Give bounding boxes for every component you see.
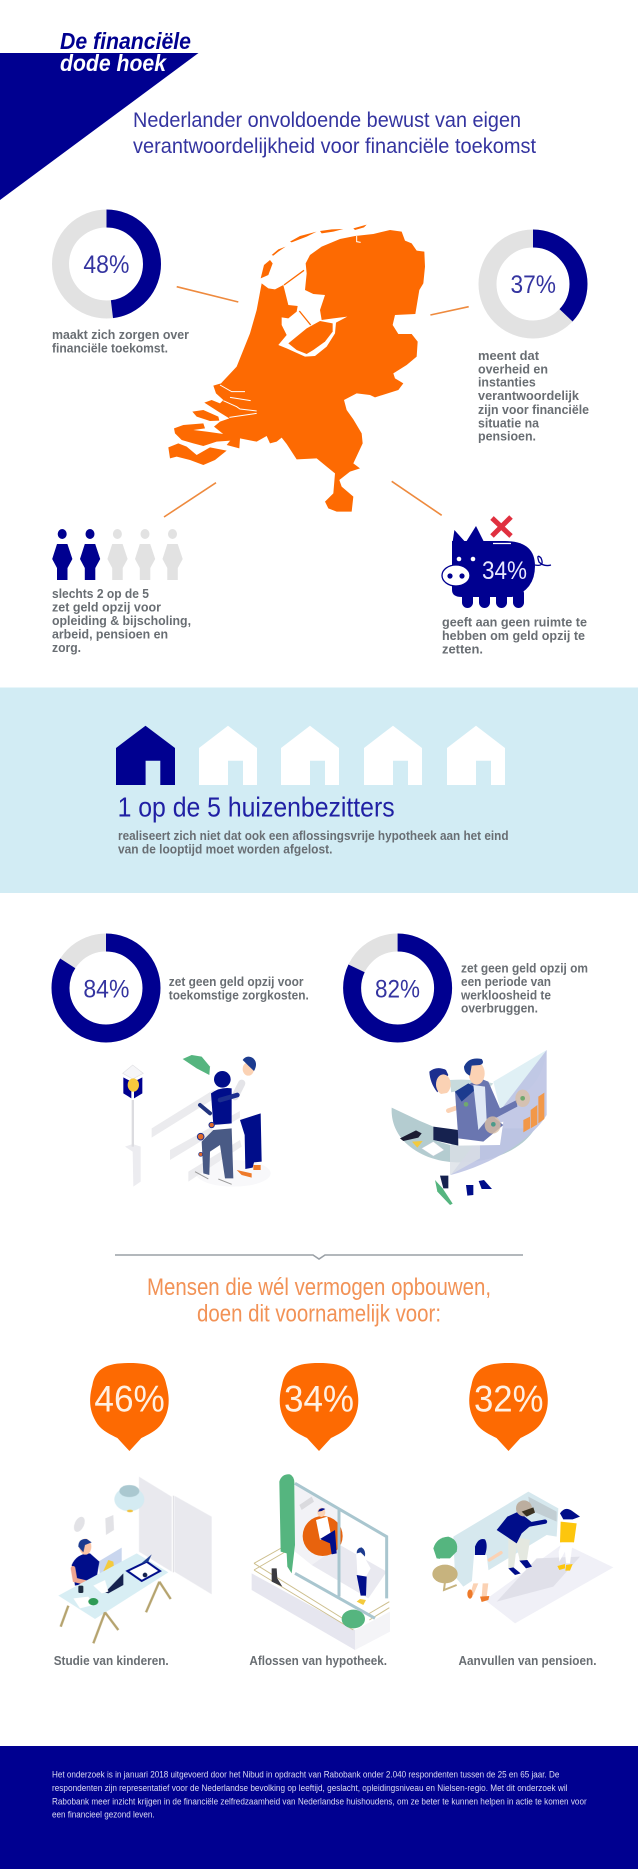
text: 2 of 5 caption <box>52 587 191 655</box>
text: 37% caption: situatie na <box>478 416 540 430</box>
text: 48% caption <box>52 328 189 356</box>
title <box>60 28 191 76</box>
illustration: family on sofa <box>432 1492 613 1623</box>
map: dikes <box>284 270 311 325</box>
icon: piggy bank 34%: 34% <box>482 557 527 585</box>
text: 2 of 5 caption: zet geld opzij voor <box>52 600 161 614</box>
text: Studie van kinderen: Studie van kinderen. <box>54 1654 169 1668</box>
illustration: balcony with orange chair <box>252 1474 390 1650</box>
text: piggy bank caption: hebben om geld opzij te <box>442 629 585 643</box>
heading: 1 op de 5 huizenbezitters: 1 op de 5 huizenbezitters <box>118 792 395 823</box>
divider with notch <box>115 1255 523 1259</box>
callout: 34% <box>280 1363 358 1451</box>
donut: 48% <box>61 218 152 310</box>
callout: 34%: 34% <box>284 1379 354 1420</box>
map of the Netherlands <box>168 225 425 512</box>
icon row: houses 1 of 5 <box>116 726 505 785</box>
subtitle: verantwoordelijkheid voor financiële toekomst <box>133 135 536 158</box>
text: 37% caption: instanties <box>478 376 536 390</box>
text: 37% caption: meent dat <box>478 349 540 363</box>
text: homeowners body <box>118 829 508 856</box>
subtitle: Nederlander onvoldoende bewust van eigen <box>133 109 521 132</box>
text: research note: een financieel gezond leven. <box>52 1810 155 1821</box>
illustration: couple on stairs with lamp post <box>123 1055 271 1187</box>
heading: people who build wealth <box>147 1274 491 1328</box>
text: 48% caption: maakt zich zorgen over <box>52 328 189 342</box>
text: piggy bank caption: zetten. <box>442 642 483 656</box>
text: 82% caption: overbruggen. <box>461 1002 538 1016</box>
text: homeowners body: van de looptijd moet worden afgelost. <box>118 842 332 856</box>
text: piggy bank caption: geeft aan geen ruimte te <box>442 616 587 630</box>
donut: 48%: 48% <box>83 251 129 279</box>
text: research note: respondenten zijn representatief voor de Nederlandse bevolking op leeftijd, geslacht, opleidingsniveau en Nielsen-regio. Met dit onderzoek wil <box>52 1783 568 1794</box>
donut: 82%: 82% <box>375 975 420 1003</box>
illustration: couple with financial chart <box>392 1050 547 1205</box>
connector lines <box>164 287 469 517</box>
donut: 37%: 37% <box>510 271 556 299</box>
illustration: man studying at desk <box>58 1477 212 1643</box>
title: De financiële <box>60 28 191 54</box>
map: Wadden islands <box>261 225 367 278</box>
text: 37% caption: verantwoordelijk <box>478 389 579 403</box>
text: 84% caption: toekomstige zorgkosten. <box>169 988 309 1002</box>
text: 84% caption: zet geen geld opzij voor <box>169 975 304 989</box>
text: research note: Het onderzoek is in januari 2018 uitgevoerd door het Nibud in opdracht van Rabobank onder 2.040 respondenten tussen de 25 en 65 jaar. De <box>52 1769 559 1780</box>
text: piggy bank caption <box>442 616 587 656</box>
text: 37% caption: zijn voor financiële <box>478 403 589 417</box>
title: dode hoek <box>60 50 167 76</box>
text: 84% caption <box>169 975 309 1002</box>
subtitle <box>133 109 536 158</box>
text: Aflossen van hypotheek: Aflossen van hypotheek. <box>249 1654 387 1668</box>
text: 2 of 5 caption: arbeid, pensioen en <box>52 628 168 642</box>
text: 2 of 5 caption: zorg. <box>52 641 81 655</box>
text: 2 of 5 caption: slechts 2 op de 5 <box>52 587 149 601</box>
icon row: people 2 of 5 <box>52 529 183 580</box>
text: 37% caption: pensioen. <box>478 430 536 444</box>
icon: red cross <box>492 517 511 536</box>
text: 82% caption: werkloosheid te <box>460 988 551 1002</box>
callout: 32%: 32% <box>474 1379 544 1420</box>
panel: homeowners <box>0 688 638 893</box>
icon: piggy bank 34% <box>442 517 551 608</box>
donut: 84%: 84% <box>83 975 129 1003</box>
text: 82% caption <box>460 961 588 1016</box>
map: water channels <box>220 236 361 417</box>
callout: 46% <box>90 1363 169 1451</box>
panel: footer <box>0 1746 638 1869</box>
callout: 46%: 46% <box>94 1379 165 1420</box>
map: Zeeland islands <box>168 410 231 465</box>
text: Aanvullen van pensioen: Aanvullen van pensioen. <box>458 1654 596 1668</box>
text: 82% caption: zet geen geld opzij om <box>461 961 588 975</box>
donut: 37% <box>488 238 578 330</box>
callout: 32% <box>469 1363 548 1451</box>
heading: people who build wealth: Mensen die wél vermogen opbouwen, <box>147 1274 491 1301</box>
header banner triangle <box>0 53 198 200</box>
text: research note <box>52 1769 587 1821</box>
donut: 84% <box>60 942 152 1034</box>
text: 37% caption: overheid en <box>478 362 548 376</box>
text: 82% caption: een periode van <box>461 975 551 989</box>
text: 37% caption <box>478 349 589 444</box>
text: 2 of 5 caption: opleiding & bijscholing, <box>52 614 191 628</box>
donut: 82% <box>352 942 443 1034</box>
text: 48% caption: financiële toekomst. <box>52 342 168 356</box>
heading: people who build wealth: doen dit voornamelijk voor: <box>197 1301 441 1328</box>
text: homeowners body: realiseert zich niet dat ook een aflossingsvrije hypotheek aan het eind <box>118 829 508 843</box>
map: Flevoland <box>288 321 333 354</box>
